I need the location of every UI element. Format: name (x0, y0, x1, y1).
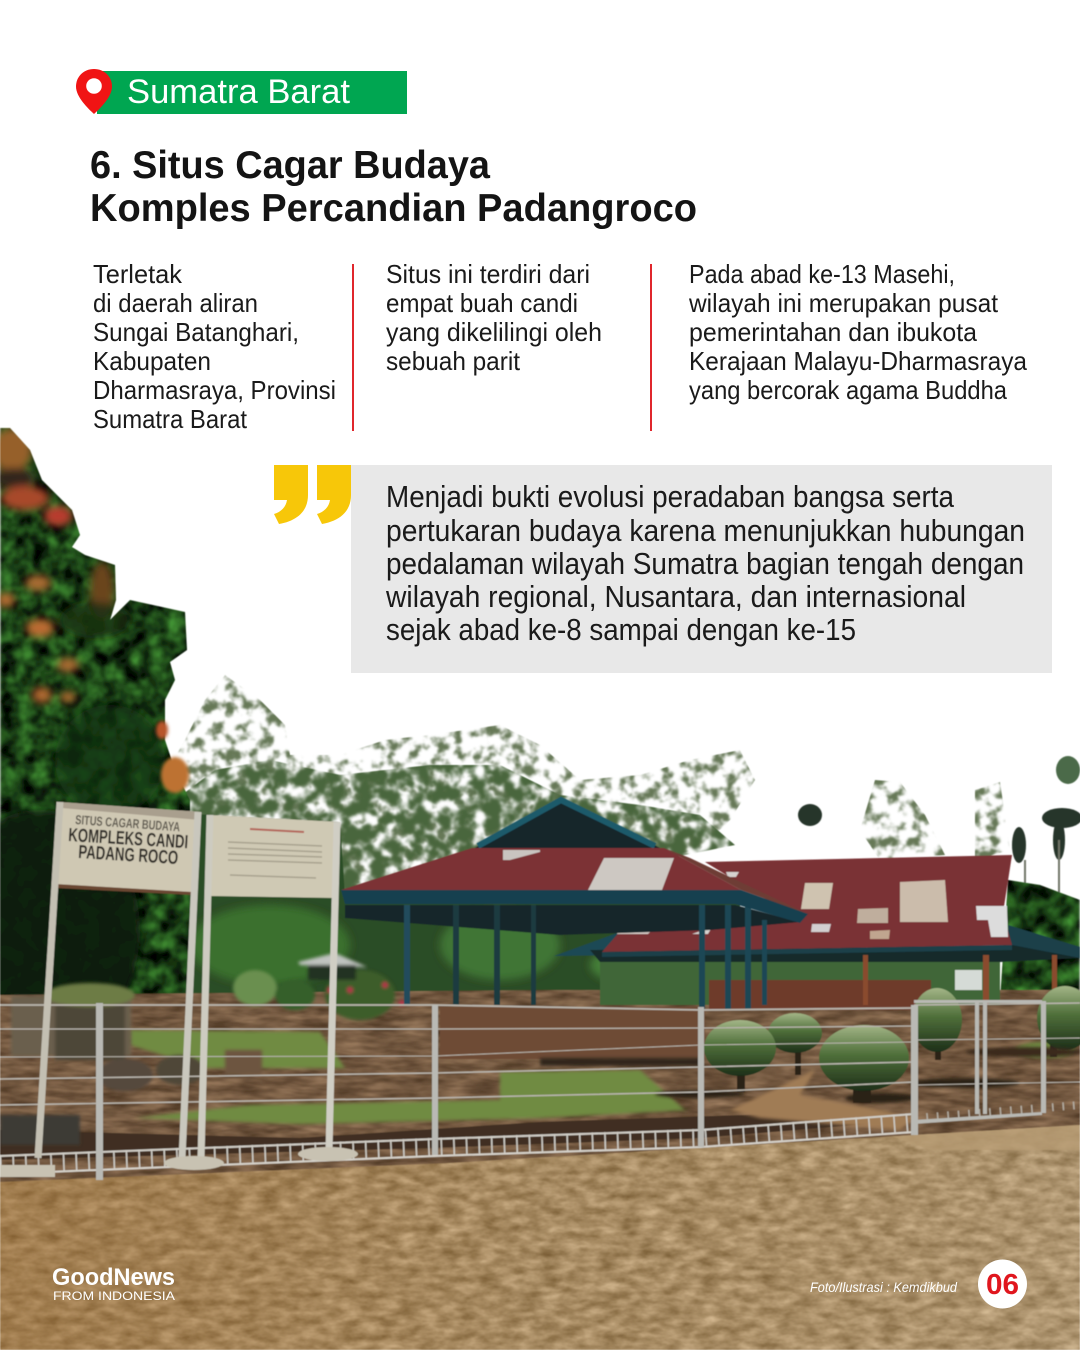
stone ruin at left (0, 996, 262, 1145)
text column 3: wilayah ini merupakan pusat (688, 288, 999, 318)
logo: GoodNews from Indonesia: FROM INDONESIA (53, 1289, 175, 1303)
logo: GoodNews from Indonesia: GoodNews (52, 1264, 175, 1291)
sign: Kompleks Candi Padang Roco (38, 802, 201, 1158)
text column 2: yang dikelilingi oleh (386, 317, 602, 347)
back pavilion interior (600, 955, 1000, 1005)
grass patches (130, 1030, 1075, 1124)
quote text: pertukaran budaya karena menunjukkan hubungan (386, 513, 1025, 548)
wire fence (0, 1003, 1080, 1174)
quote text: wilayah regional, Nusantara, dan internasional (385, 579, 966, 614)
text column 1: Sumatra Barat (93, 404, 248, 434)
sign: Kompleks Candi Padang Roco: PADANG ROCO (78, 842, 179, 869)
trimmed shrubs (704, 986, 1080, 1103)
middle ground soil (0, 985, 1080, 1190)
sparse tree with yellow leaves (974, 782, 1010, 857)
text column 1: Kabupaten (93, 346, 211, 376)
title: Komples Percandian Padangroco (90, 187, 697, 230)
quote text: pedalaman wilayah Sumatra bagian tengah dengan (386, 546, 1024, 581)
dark terrace under the fence mesh (0, 1112, 915, 1160)
text column 3 (688, 259, 1028, 405)
sparse trees at right (862, 779, 946, 858)
foreground dirt ground (0, 1115, 1080, 1350)
sign: Kompleks Candi Padang Roco: KOMPLEKS CANDI (68, 825, 189, 853)
sign: Kompleks Candi Padang Roco: SITUS CAGAR BUDAYA (75, 812, 181, 834)
banner bar (97, 71, 407, 114)
sign: information board (201, 815, 340, 1158)
title: 6. Situs Cagar Budaya (90, 144, 490, 187)
front pavilion underside and columns (345, 905, 800, 1010)
right forest (1000, 879, 1080, 991)
garden plants (45, 953, 405, 1020)
back pavilion roof (602, 855, 1012, 957)
front pavilion roof (341, 848, 808, 923)
front pavilion gable (475, 797, 660, 848)
text column 3: pemerintahan dan ibukota (689, 317, 978, 347)
banner label: Sumatra Barat (127, 73, 351, 111)
text column 2 (386, 259, 602, 376)
canopy mid tones (70, 895, 710, 987)
text column 3: Pada abad ke-13 Masehi, (689, 259, 955, 289)
quote text: sejak abad ke-8 sampai dengan ke-15 (386, 612, 856, 647)
path and terraces (540, 1047, 1080, 1130)
text column 2: sebuah parit (386, 346, 521, 376)
quote text (385, 479, 1025, 647)
photo credit: Foto/Ilustrasi : Kemdikbud (810, 1279, 958, 1295)
text column 3: Kerajaan Malayu-Dharmasraya (689, 346, 1028, 376)
page number badge: 06 (986, 1269, 1019, 1301)
page number badge (978, 1260, 1027, 1308)
big flowering tree at left (0, 427, 191, 996)
text column 2: Situs ini terdiri dari (386, 259, 590, 289)
text column 1: di daerah aliran (93, 288, 258, 318)
palm trees (798, 756, 1080, 910)
forest behind the signs (150, 810, 740, 1005)
text column 2: empat buah candi (386, 288, 578, 318)
quote panel (274, 465, 1052, 673)
title (90, 144, 697, 230)
text column 1 (93, 259, 336, 434)
denser lower canopy (185, 760, 736, 890)
fence posts and gate (96, 1000, 1046, 1180)
orange foliage beside the tree (156, 721, 189, 793)
logo: GoodNews from Indonesia (52, 1264, 175, 1303)
text column 1: Dharmasraya, Provinsi (93, 375, 336, 405)
text column 3: yang bercorak agama Buddha (689, 375, 1007, 405)
quote text: Menjadi bukti evolusi peradaban bangsa serta (386, 479, 955, 514)
photo: temple site (0, 420, 1080, 1350)
text column 1: Sungai Batanghari, (93, 317, 299, 347)
background light trees (178, 674, 756, 886)
concrete sign footings (0, 1147, 358, 1177)
brown wall (709, 980, 931, 1010)
icon: map pin (76, 69, 112, 114)
location banner (76, 69, 407, 114)
panel background (351, 465, 1052, 673)
icon: quotation marks (274, 465, 351, 524)
back pavilion wings (554, 925, 1080, 1005)
text column 1: Terletak (93, 259, 183, 289)
wood wall behind the fence (440, 1007, 705, 1059)
